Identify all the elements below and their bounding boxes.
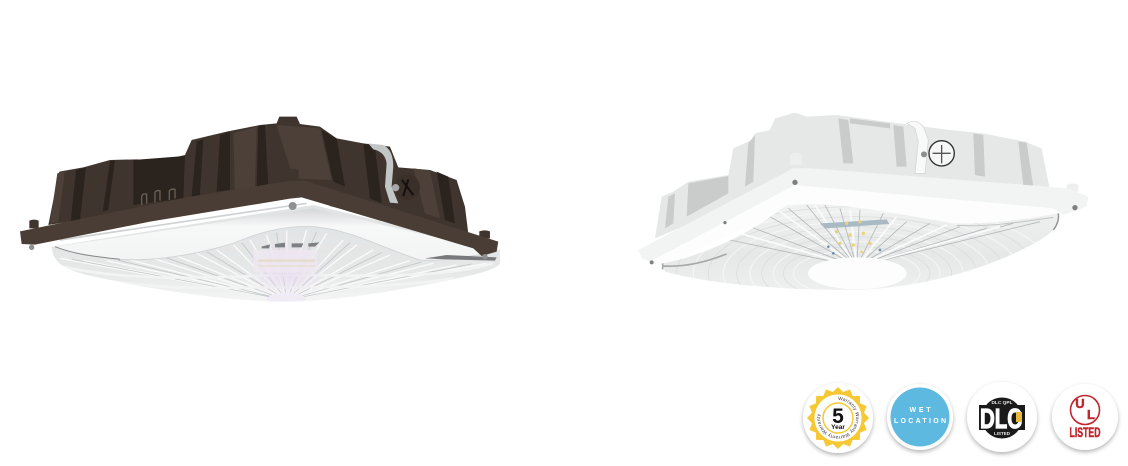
badge: DLC QPL listed: DLC — [980, 403, 1022, 434]
product: white canopy light — [638, 112, 1088, 290]
clear lens — [662, 204, 1060, 290]
badge: wet location: WET — [910, 407, 931, 414]
badge: UL listed: U — [1075, 396, 1085, 411]
white flange and bezel — [638, 168, 1088, 265]
white housing — [638, 113, 1088, 265]
badge: 5 year warranty — [800, 382, 876, 458]
bronze housing — [29, 117, 490, 238]
badge: 5 year warranty: 5 — [832, 405, 844, 428]
chrome edges — [663, 254, 727, 269]
badge: 5 year warranty: Warranty Warranty Warranty Warranty — [816, 396, 860, 438]
product: bronze canopy light — [20, 117, 500, 307]
badge: DLC QPL listed — [967, 382, 1037, 452]
center reflector — [808, 257, 907, 289]
warranty seal — [807, 387, 869, 449]
badge: UL listed: LISTED — [1070, 424, 1100, 440]
badge: DLC QPL listed: LISTED — [994, 431, 1011, 436]
badge: UL listed: L — [1087, 407, 1095, 422]
badge: wet location — [887, 384, 953, 450]
bezel: clear upper band — [55, 208, 497, 260]
badge: UL listed — [1052, 384, 1118, 450]
badge: DLC QPL listed: DLC QPL — [991, 400, 1013, 406]
badge: wet location: LOCATION — [894, 418, 946, 425]
rim reflection — [330, 205, 497, 247]
bronze flange — [20, 181, 498, 259]
badge: 5 year warranty: Year — [831, 424, 845, 431]
clear lens — [52, 203, 500, 307]
